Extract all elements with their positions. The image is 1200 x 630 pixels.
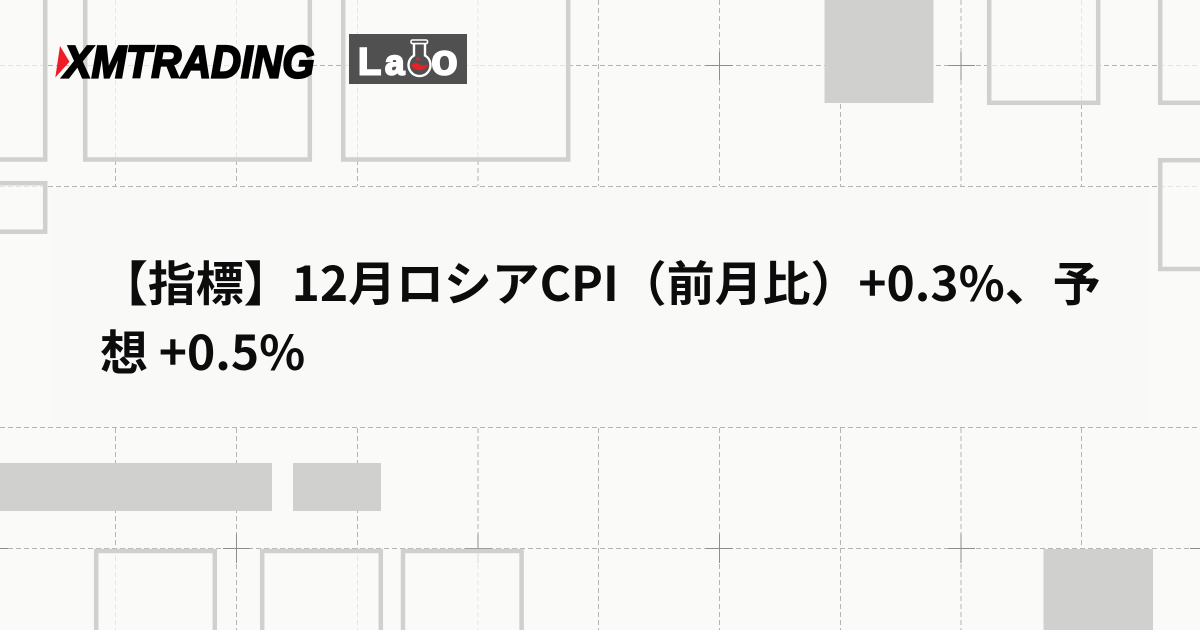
logo: Lab with flask: L (358, 41, 381, 83)
logo: Lab with flask (349, 34, 467, 84)
logo: Lab with flask: o (431, 35, 458, 84)
logo: Lab with flask: a (385, 43, 405, 82)
icon: flask (408, 40, 430, 76)
title: 【指標】12月ロシアCPI（前月比）+0.3%、予想 +0.5% (100, 245, 1100, 384)
